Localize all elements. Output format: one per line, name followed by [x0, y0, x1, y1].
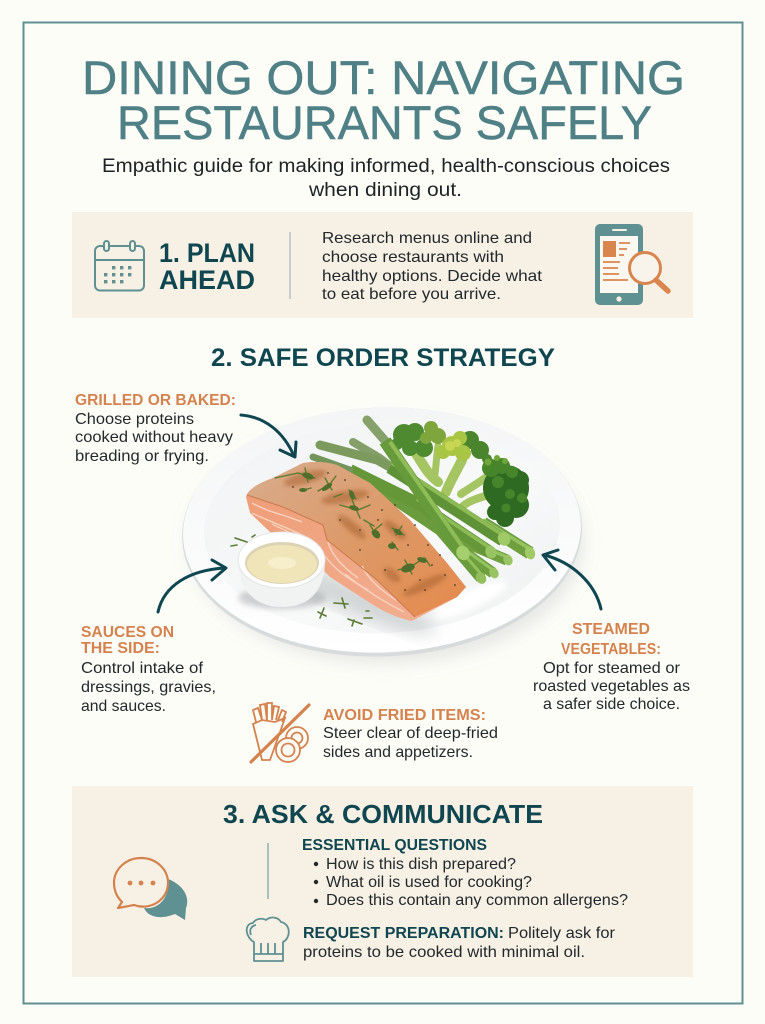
herbs and pepper on salmon	[275, 468, 430, 574]
text: essential questions: How is this dish prepared?	[326, 856, 516, 873]
callout: avoid fried items: sides and appetizers.	[323, 744, 473, 761]
photo: plate of salmon, asparagus, broccoli and sauce	[178, 401, 586, 664]
callout: sauces on the side	[81, 624, 216, 715]
text: plan ahead description: Research menus online and	[322, 230, 532, 247]
text: essential questions: Does this contain any common allergens?	[326, 892, 628, 909]
text: request preparation: Politely ask for	[508, 925, 616, 942]
text: request preparation	[303, 925, 616, 961]
panel: ask and communicate	[72, 786, 693, 977]
callout: grilled or baked: cooked without heavy	[75, 429, 233, 446]
callout: grilled or baked: breading or frying.	[75, 448, 209, 465]
icon: phone with magnifier	[595, 224, 668, 305]
arrow: to salmon	[241, 415, 296, 457]
heading: ask and communicate: 3. ASK & COMMUNICATE	[223, 801, 543, 829]
icon: calendar	[95, 241, 144, 290]
callout: avoid fried items: Steer clear of deep-fried	[323, 725, 498, 742]
text: essential questions: What oil is used for cooking?	[326, 874, 532, 891]
sauce ramekin	[238, 532, 326, 609]
callout: sauces on the side: and sauces.	[81, 698, 166, 715]
callout: avoid fried items	[323, 707, 498, 761]
callout: avoid fried items: AVOID FRIED ITEMS:	[323, 707, 486, 724]
title: DINING OUT: NAVIGATING	[82, 51, 685, 104]
title: RESTAURANTS SAFELY	[117, 96, 652, 149]
heading: plan ahead: 1. PLAN	[159, 238, 255, 268]
callout: sauces on the side: SAUCES ON	[81, 624, 174, 641]
broccoli	[391, 421, 529, 527]
heading: safe order strategy: 2. SAFE ORDER STRATEGY	[211, 344, 555, 372]
icon: no fries or onion rings	[251, 703, 309, 762]
callout: sauces on the side: THE SIDE:	[81, 640, 160, 657]
title	[82, 51, 685, 149]
text: request preparation: REQUEST PREPARATION:	[303, 925, 504, 942]
text: plan ahead description: to eat before you arrive.	[322, 286, 501, 303]
text: essential questions	[302, 837, 628, 909]
herb garnish on plate	[231, 535, 372, 626]
arrow: to sauce	[158, 560, 226, 612]
callout: steamed vegetables: STEAMED	[572, 621, 650, 638]
arrow: to vegetables	[543, 550, 601, 609]
text: request preparation: proteins to be cooked with minimal oil.	[303, 944, 585, 961]
callout: steamed vegetables: VEGETABLES:	[561, 641, 661, 658]
subtitle	[102, 156, 670, 201]
callout: steamed vegetables	[533, 621, 690, 713]
asparagus cut ends	[454, 530, 537, 586]
heading: plan ahead: AHEAD	[159, 265, 255, 295]
text: essential questions: ESSENTIAL QUESTIONS	[302, 837, 487, 854]
callout: sauces on the side: Control intake of	[81, 660, 204, 677]
text: plan ahead description	[322, 230, 543, 303]
text: plan ahead description: choose restaurants with	[322, 249, 504, 266]
subtitle: Empathic guide for making informed, health-conscious choices	[102, 156, 670, 177]
text: plan ahead description: healthy options. Decide what	[322, 268, 543, 285]
panel: plan ahead	[72, 212, 693, 318]
callout: steamed vegetables: roasted vegetables as	[533, 678, 690, 695]
salmon	[246, 462, 466, 621]
callout: grilled or baked: GRILLED OR BAKED:	[75, 392, 236, 409]
callout: grilled or baked: Choose proteins	[75, 411, 194, 428]
heading: plan ahead	[159, 238, 255, 295]
callout: grilled or baked	[75, 392, 236, 465]
subtitle: when dining out.	[308, 180, 462, 201]
callout: steamed vegetables: a safer side choice.	[543, 696, 680, 713]
asparagus	[313, 420, 530, 578]
callout: sauces on the side: dressings, gravies,	[81, 679, 216, 696]
callout: steamed vegetables: Opt for steamed or	[543, 660, 681, 677]
icon: chef hat	[247, 918, 289, 961]
icon: chat bubbles	[114, 858, 187, 920]
